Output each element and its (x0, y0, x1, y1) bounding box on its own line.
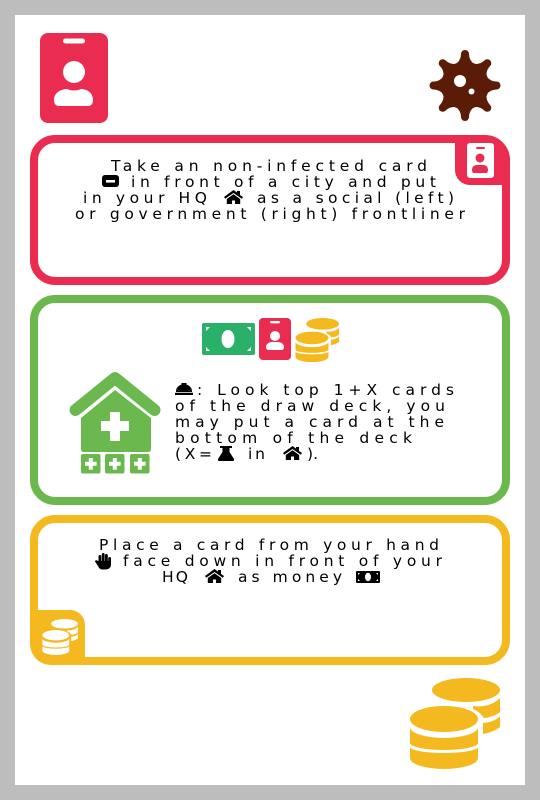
text: green panel instructions: : Look top 1+X cards (197, 381, 454, 399)
text: green panel instructions: may put a card at the (175, 413, 444, 431)
text: yellow panel instructions: face down in front of your (123, 552, 443, 570)
text: red panel instructions: in front of a city and put (131, 173, 436, 191)
text: red panel instructions: or government (right) frontliner (75, 205, 466, 223)
icon: hospital house (76, 378, 154, 474)
panel: place as money (yellow) (30, 519, 506, 665)
text: red panel instructions: as a social (left) (257, 189, 454, 207)
text: green panel instructions: bottom of the deck (175, 429, 412, 447)
icon: corner ID badge tab (455, 139, 506, 185)
icon: small ID badge (259, 318, 291, 360)
text: yellow panel instructions: Place a card from your hand (99, 536, 439, 554)
text: yellow panel instructions (95, 536, 443, 586)
icon: large coins (410, 678, 500, 769)
text: yellow panel instructions: HQ (162, 568, 188, 586)
panel: take a card (red) (34, 139, 506, 281)
text: green panel instructions (175, 381, 454, 463)
icon: red ID badge (40, 33, 108, 123)
text: yellow panel instructions: as money (238, 568, 342, 586)
icon: small coins (295, 318, 339, 362)
text: red panel instructions: Take an non-infected card (110, 157, 427, 175)
icon: banknote (202, 323, 255, 355)
icon: virus (430, 50, 500, 121)
text: green panel instructions: (X= (175, 445, 212, 463)
text: red panel instructions: in your HQ (83, 189, 207, 207)
text: green panel instructions: of the draw deck, you (175, 397, 445, 415)
panel: look at cards (green) (34, 299, 506, 501)
text: green panel instructions: ). (307, 445, 318, 463)
text: red panel instructions (75, 157, 466, 223)
text: green panel instructions: in (248, 445, 265, 463)
icon: corner coins tab (30, 610, 85, 665)
